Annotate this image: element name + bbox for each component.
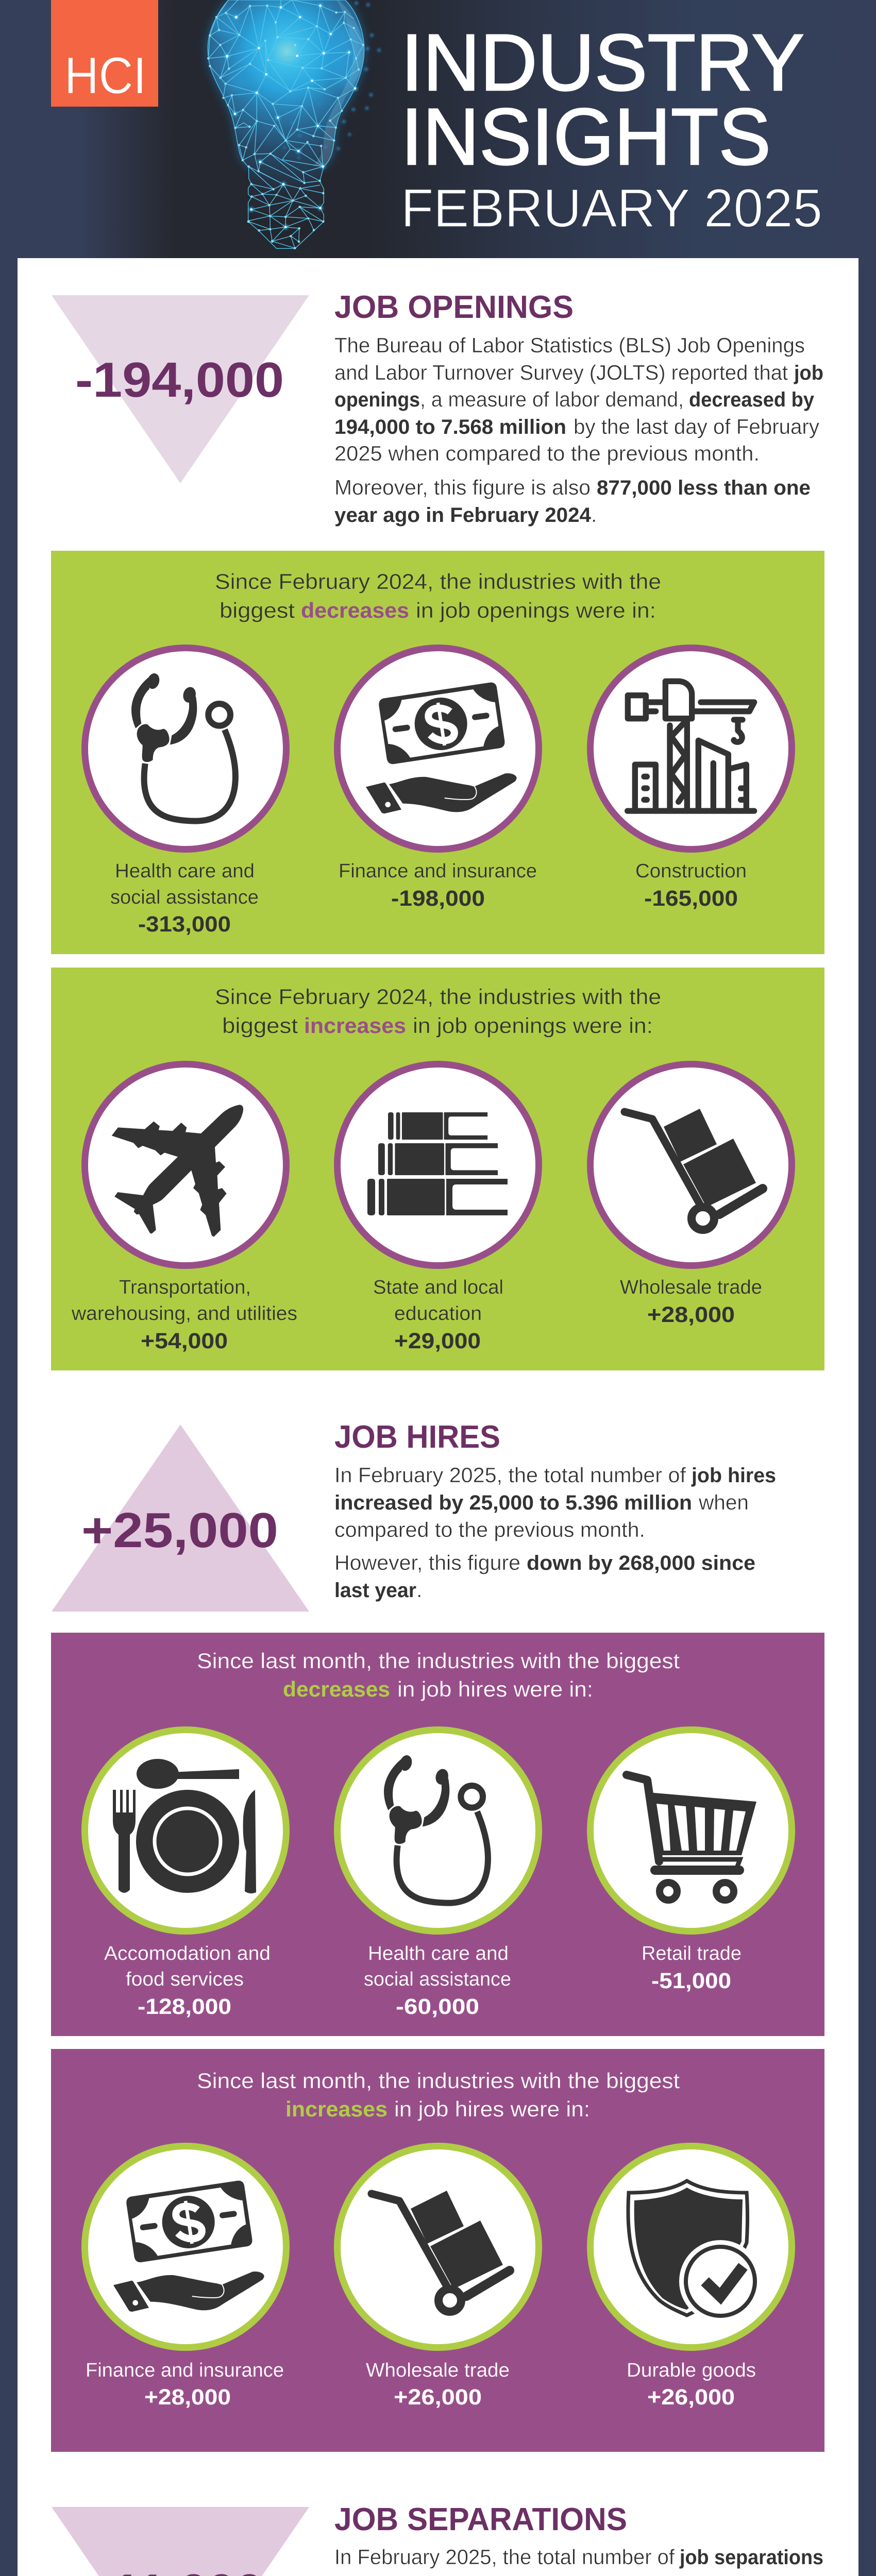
panel heading xyxy=(215,569,661,622)
item: accommodation: Accomodation and xyxy=(104,1943,271,1964)
icon: construction crane xyxy=(591,648,791,849)
icon: money in hand xyxy=(337,648,539,849)
text block: job hires description: last year xyxy=(334,1579,416,1602)
item: construction: Construction xyxy=(635,860,747,882)
item: accommodation: food services xyxy=(126,1969,244,1990)
panel: job opening increases xyxy=(51,968,824,1370)
text block: job separations description xyxy=(334,2545,823,2576)
item: finance: +28,000 xyxy=(144,2385,231,2410)
panel heading: increases xyxy=(304,1013,406,1038)
icon: hand truck xyxy=(591,1064,791,1265)
panel heading xyxy=(215,985,661,1038)
heading: job separations: JOB SEPARATIONS xyxy=(334,2502,627,2537)
item: health care: Health care and xyxy=(368,1943,509,1964)
text block: job openings description: 2025 when compared to the previous month. xyxy=(334,442,760,465)
panel heading: in job hires were in: xyxy=(394,2097,590,2121)
text block: job hires description: down by 268,000 since xyxy=(527,1552,755,1574)
panel heading: Since February 2024, the industries with the xyxy=(215,569,661,594)
text block: job openings description xyxy=(334,333,823,527)
panel heading: increases xyxy=(285,2097,388,2121)
panel heading: biggest xyxy=(222,1013,298,1038)
logo: HCI: HCI xyxy=(64,47,146,105)
panel heading: Since February 2024, the industries with the xyxy=(215,985,661,1009)
item: accommodation xyxy=(104,1943,271,2019)
header banner xyxy=(51,0,820,258)
item: health care xyxy=(364,1943,511,2019)
item: wholesale: +26,000 xyxy=(394,2385,482,2410)
item: health care: social assistance xyxy=(110,887,259,908)
text block: job hires description: . xyxy=(416,1578,422,1602)
item: wholesale xyxy=(366,2360,510,2410)
item: health care: -313,000 xyxy=(138,912,231,937)
icon: shopping cart xyxy=(591,1730,791,1931)
panel heading: in job openings were in: xyxy=(416,598,656,622)
text block: job openings description: Moreover, this figure is also xyxy=(334,476,591,499)
icon: stethoscope xyxy=(85,648,287,849)
panel heading xyxy=(197,1649,680,1701)
item: education: +29,000 xyxy=(394,1329,481,1353)
icon: money in hand xyxy=(85,2146,287,2347)
item: finance xyxy=(86,2360,284,2410)
item: health care: -60,000 xyxy=(396,1994,479,2019)
text block: job hires description: compared to the previous month. xyxy=(334,1518,645,1541)
item: transportation: warehousing, and utilities xyxy=(71,1303,297,1325)
icon: books xyxy=(337,1064,539,1265)
stat: +25,000: +25,000 xyxy=(81,1503,278,1558)
text block: job openings description: 194,000 to 7.568 million xyxy=(334,416,566,438)
icon: hand truck xyxy=(337,2146,539,2347)
item: finance: Finance and insurance xyxy=(339,860,537,882)
panel heading: in job hires were in: xyxy=(397,1677,593,1701)
item: education: education xyxy=(394,1303,482,1325)
text block: job openings description: job xyxy=(794,362,823,384)
logo: HCI xyxy=(51,0,158,107)
item: transportation xyxy=(71,1277,297,1353)
text block: job hires description: when xyxy=(698,1490,749,1514)
panel heading: decreases xyxy=(283,1677,390,1701)
title: FEBRUARY 2025 xyxy=(401,178,822,239)
triangle: decrease xyxy=(52,295,309,483)
item: wholesale: Wholesale trade xyxy=(366,2360,510,2381)
item: construction: -165,000 xyxy=(644,886,738,911)
text block: job hires description: job hires xyxy=(691,1464,776,1487)
text block: job openings description: by the last day of February xyxy=(574,415,819,438)
item: wholesale: +28,000 xyxy=(647,1302,735,1327)
text block: job hires description: increased by 25,000 to 5.396 million xyxy=(334,1492,692,1514)
panel heading xyxy=(197,2069,680,2121)
item: transportation: Transportation, xyxy=(119,1277,251,1298)
item: construction xyxy=(635,860,747,911)
text block: job separations description: In February 2025, the total number of xyxy=(334,2545,675,2569)
item: finance: Finance and insurance xyxy=(86,2360,284,2381)
text block: job hires description: In February 2025, the total number of xyxy=(334,1463,686,1487)
icon: shield with check xyxy=(591,2146,791,2347)
item: transportation: +54,000 xyxy=(141,1329,228,1353)
icon: plate setting xyxy=(85,1730,287,1931)
text block: job openings description: decreased by xyxy=(689,388,815,411)
item: retail xyxy=(642,1943,742,1993)
text block: job hires description: However, this figure xyxy=(334,1551,520,1574)
title: INSIGHTS xyxy=(401,92,771,182)
title xyxy=(401,18,822,239)
item: finance: -198,000 xyxy=(391,886,485,911)
icon: glowing network light bulb xyxy=(207,0,381,249)
panel: job hire decreases xyxy=(51,1633,824,2036)
item: durable goods: Durable goods xyxy=(627,2360,756,2381)
text block: job openings description: 877,000 less than one xyxy=(597,477,811,499)
icon: airplane xyxy=(85,1064,287,1265)
panel: job opening decreases xyxy=(51,551,824,954)
text block: job openings description: The Bureau of Labor Statistics (BLS) Job Openings xyxy=(334,333,805,357)
section: job hires xyxy=(52,1419,776,1612)
item: health care: Health care and xyxy=(115,860,255,882)
panel heading: in job openings were in: xyxy=(413,1013,653,1038)
item: education: State and local xyxy=(373,1277,503,1298)
text block: job separations description: job separations xyxy=(679,2546,823,2569)
item: durable goods: +26,000 xyxy=(647,2385,735,2410)
item: accommodation: -128,000 xyxy=(138,1994,231,2019)
triangle: increase xyxy=(52,1425,309,1612)
section: job openings xyxy=(52,290,823,527)
title: INDUSTRY xyxy=(401,18,804,108)
item: health care xyxy=(110,860,259,937)
heading: job openings: JOB OPENINGS xyxy=(334,290,574,325)
text block: job openings description: . xyxy=(591,503,597,527)
item: wholesale: Wholesale trade xyxy=(620,1277,762,1298)
stat: -194,000: -194,000 xyxy=(75,352,284,408)
text block: job hires description xyxy=(334,1463,776,1602)
item: durable goods xyxy=(627,2360,756,2410)
text block: job openings description: , a measure of labor demand, xyxy=(420,387,684,411)
panel heading: Since last month, the industries with the biggest xyxy=(197,1649,680,1673)
section: job separations xyxy=(52,2502,823,2576)
icon: stethoscope xyxy=(337,1730,539,1931)
item: retail: Retail trade xyxy=(642,1943,742,1964)
text block: job openings description: openings xyxy=(334,388,420,411)
item: retail: -51,000 xyxy=(651,1969,731,1993)
panel heading: decreases xyxy=(301,598,409,622)
text block: job openings description: year ago in February 2024 xyxy=(334,504,592,527)
triangle: decrease xyxy=(52,2507,309,2576)
item: finance xyxy=(339,860,537,911)
panel heading: Since last month, the industries with the biggest xyxy=(197,2069,680,2093)
heading: job hires: JOB HIRES xyxy=(334,1419,500,1455)
text block: job openings description: and Labor Turnover Survey (JOLTS) reported that xyxy=(334,361,788,384)
panel: job hire increases xyxy=(51,2049,824,2452)
item: health care: social assistance xyxy=(364,1969,511,1990)
item: wholesale xyxy=(620,1277,762,1327)
panel heading: biggest xyxy=(220,598,295,622)
item: education xyxy=(373,1277,503,1353)
